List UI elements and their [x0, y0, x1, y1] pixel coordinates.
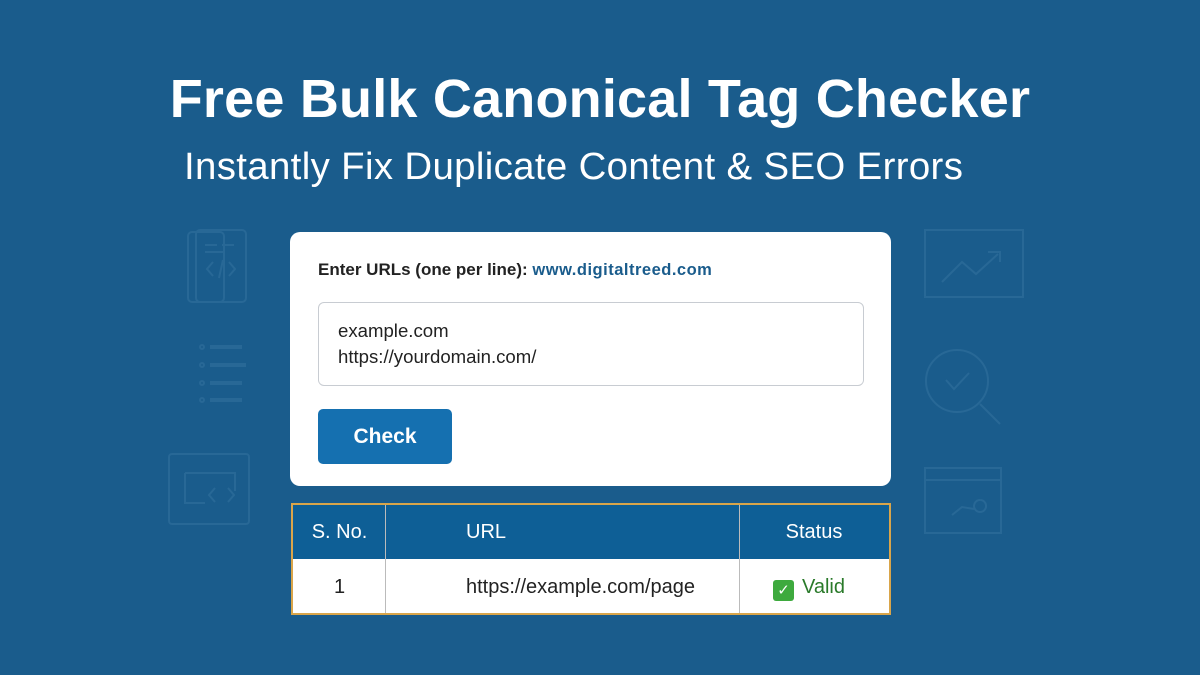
icon: code document — [188, 230, 246, 302]
table row: 1 — [334, 576, 345, 598]
textarea: https://yourdomain.com/ — [338, 346, 536, 367]
icon: magnifier check — [926, 350, 1000, 424]
icon: list — [200, 345, 246, 402]
table row: ✓ — [777, 582, 790, 599]
table header: Status — [786, 521, 842, 543]
icon: code window — [169, 454, 249, 524]
table row — [334, 576, 845, 601]
button: Check: Check — [353, 425, 417, 448]
icon: browser — [925, 468, 1001, 533]
textarea: example.com — [338, 320, 449, 341]
panel: input card — [290, 232, 891, 486]
table row: https://example.com/page — [466, 576, 695, 598]
textarea — [318, 302, 864, 386]
subtitle: Instantly Fix Duplicate Content & SEO Errors — [184, 145, 963, 188]
label: Enter URLs (one per line): www.digitaltreed.com — [318, 260, 712, 279]
table header: URL — [466, 521, 506, 543]
results table — [291, 503, 891, 615]
table header — [293, 505, 889, 559]
title: Free Bulk Canonical Tag Checker — [170, 69, 1030, 129]
table header: S. No. — [312, 521, 367, 543]
table row: Valid — [802, 576, 845, 598]
button: Check — [318, 409, 452, 464]
icon: chart — [925, 230, 1023, 297]
